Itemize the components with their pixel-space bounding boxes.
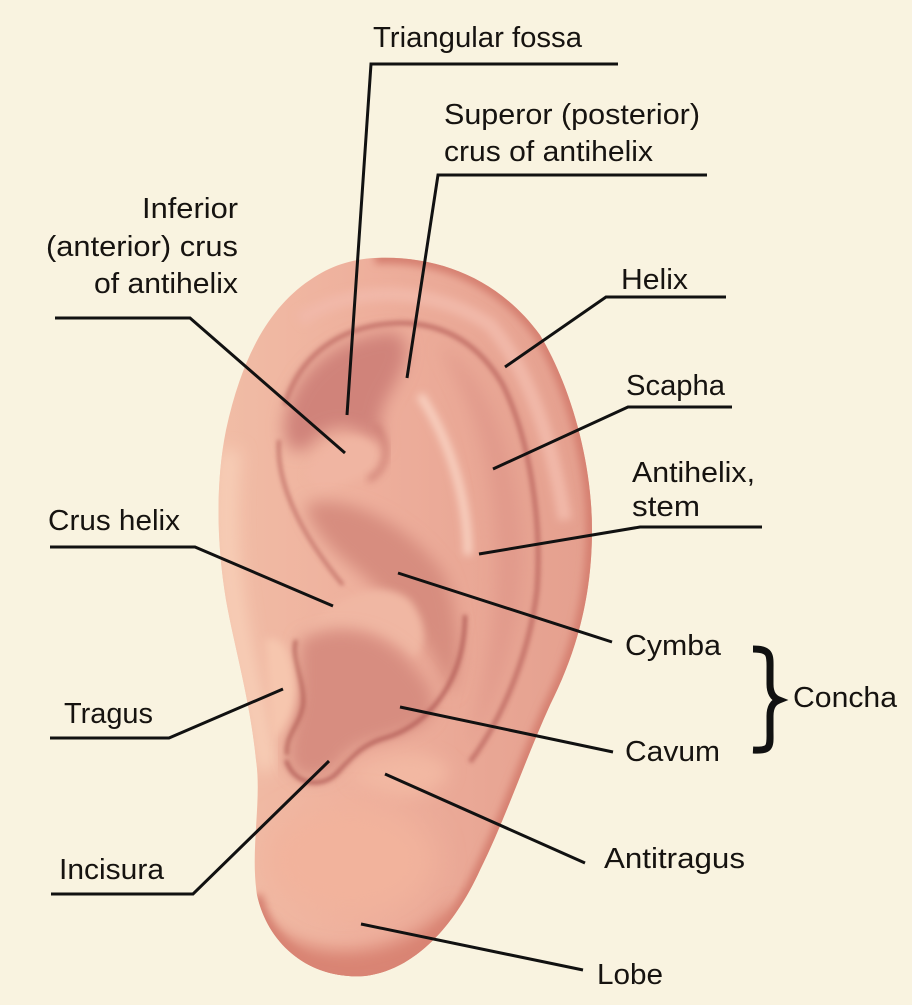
line: incisura (51, 761, 329, 894)
line: antihelix stem (479, 527, 762, 554)
tragus (265, 639, 295, 738)
ear shading (226, 258, 592, 990)
line: triangular fossa (347, 64, 618, 415)
ear base shape (218, 258, 592, 976)
cavum conchae (287, 630, 434, 779)
label: Scapha: Scapha (626, 370, 726, 402)
label: Crus helix: Crus helix (48, 505, 181, 537)
label: Antihelix stem: Antihelix, (632, 457, 755, 489)
concha edge (286, 615, 465, 783)
label: Cymba: Cymba (625, 630, 722, 662)
label: Tragus: Tragus (64, 698, 153, 730)
line: lobe (361, 924, 583, 970)
line: superior crus (407, 175, 707, 378)
label: Superior crus: crus of antihelix (444, 136, 654, 168)
left side light (226, 450, 266, 770)
line: cavum (400, 707, 613, 752)
antihelix inner groove (279, 440, 343, 585)
line: crus helix (50, 547, 333, 606)
antitragus (371, 757, 444, 792)
lobe shadow (272, 906, 452, 976)
label: Superior crus (444, 99, 700, 168)
line: helix (505, 297, 726, 367)
label: Superior crus: Superor (posterior) (444, 99, 700, 131)
label: Inferior crus: Inferior (142, 193, 238, 225)
leader lines (50, 64, 762, 970)
label: Inferior crus (46, 193, 239, 300)
label: Inferior crus: of antihelix (94, 268, 239, 300)
scapha fill (462, 375, 518, 680)
antihelix ridge highlight (420, 395, 468, 555)
line: scapha (493, 407, 732, 469)
crus helix (360, 588, 426, 654)
triangular fossa (284, 332, 406, 451)
bracket: Concha (753, 649, 779, 750)
scapha inner edge (285, 323, 538, 762)
label: Antihelix stem (632, 457, 755, 523)
label: Inferior crus: (anterior) crus (46, 231, 238, 263)
label: Cavum: Cavum (625, 736, 720, 768)
inferior crus (356, 438, 375, 456)
lobe (265, 805, 435, 915)
label: Lobe: Lobe (597, 959, 663, 991)
label: Antitragus: Antitragus (604, 843, 745, 875)
line: cymba (398, 573, 612, 642)
inferior crus shadow (368, 425, 386, 480)
line: tragus (50, 689, 283, 738)
tragus edge (287, 640, 303, 755)
label: Incisura: Incisura (59, 854, 165, 886)
label: Triangular fossa: Triangular fossa (373, 22, 583, 54)
illustration: ear (218, 258, 592, 990)
line: inferior crus (55, 318, 345, 453)
line: antitragus (385, 774, 585, 863)
label: Antihelix stem: stem (632, 491, 700, 523)
cymba conchae (305, 501, 459, 695)
label: Helix: Helix (621, 264, 689, 296)
helix highlight (300, 294, 565, 520)
label: Concha: Concha (793, 682, 898, 714)
rim shadow (257, 258, 592, 976)
